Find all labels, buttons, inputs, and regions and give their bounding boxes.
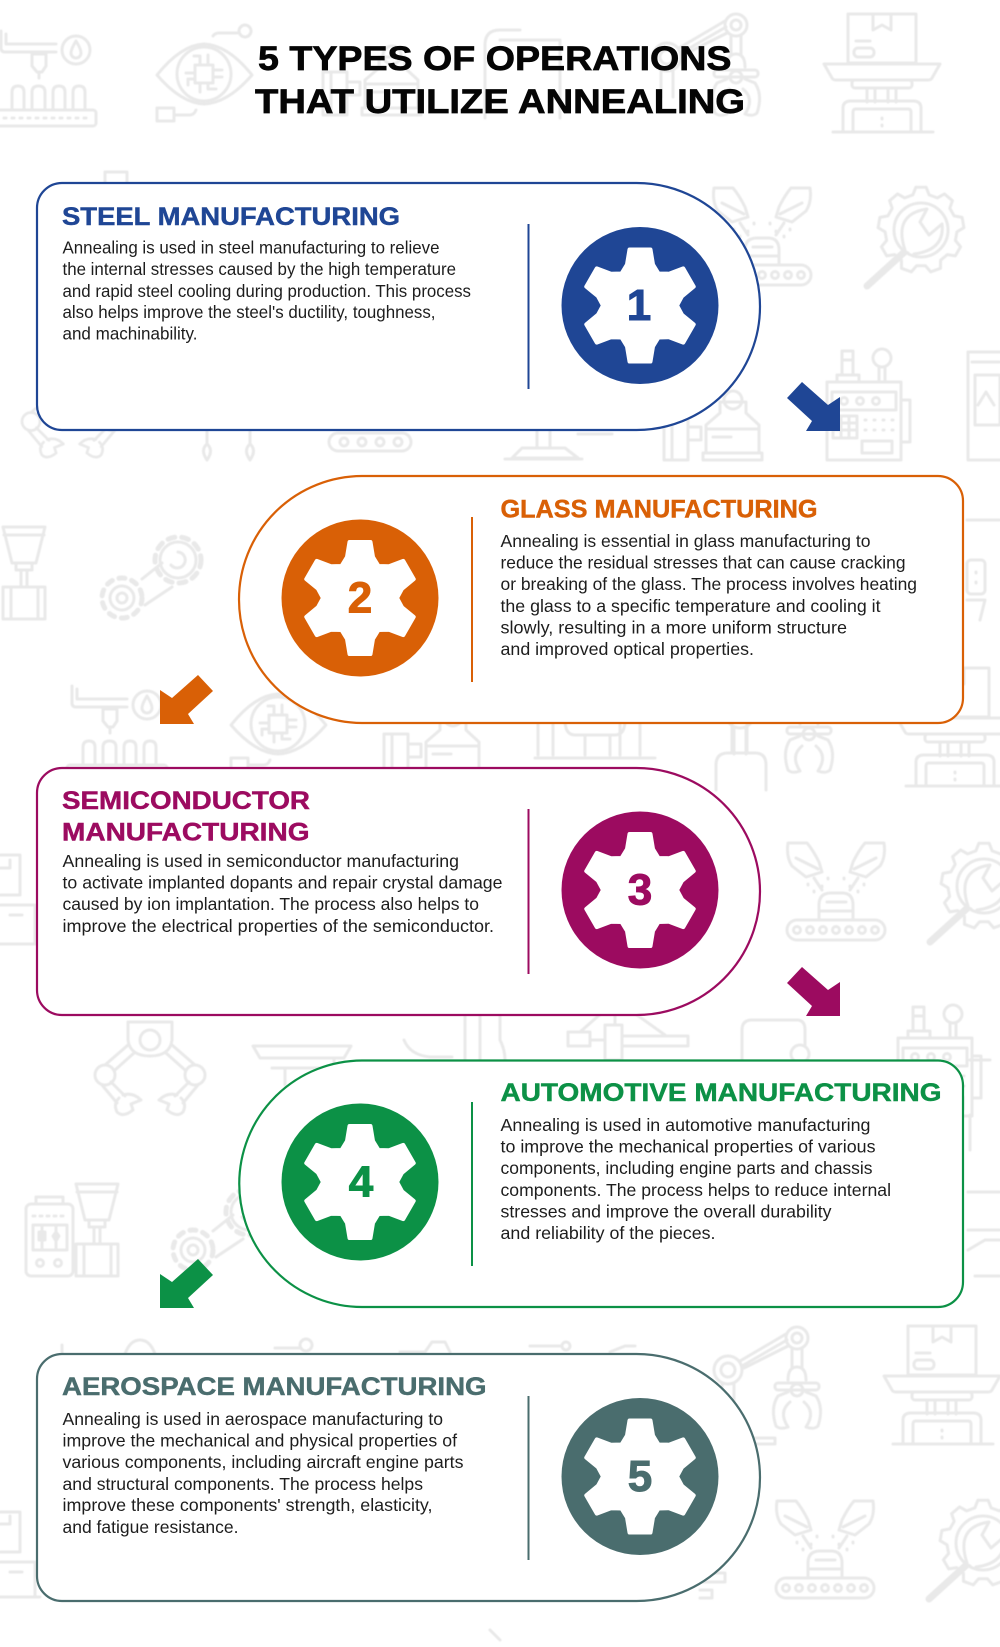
title	[255, 40, 745, 121]
panel 5 body text: improve these components' strength, elasticity,	[62, 1495, 432, 1515]
icon: gear number 3	[562, 812, 718, 968]
arrow: glass to semiconductor	[160, 675, 213, 724]
panel 3 body text: caused by ion implantation. The process also helps to	[62, 894, 479, 914]
icon: gear number 4	[282, 1104, 438, 1260]
title: 5 TYPES OF OPERATIONS	[258, 40, 732, 78]
arrow: semiconductor to automotive	[787, 967, 840, 1016]
panel 5 divider	[528, 1396, 530, 1560]
panel 3 heading: MANUFACTURING	[62, 820, 310, 846]
panel 4 divider	[471, 1102, 473, 1266]
panel 2 outline	[239, 476, 963, 723]
panel 5 body text	[62, 1409, 464, 1537]
panel 2 body text: Annealing is essential in glass manufacturing to	[500, 531, 870, 551]
panel 5 body text: and fatigue resistance.	[62, 1517, 238, 1537]
panel 4 body text: and reliability of the pieces.	[500, 1223, 716, 1243]
panel: aerospace manufacturing	[37, 1354, 760, 1601]
icon: gear number 5: 5	[628, 1452, 652, 1501]
icon: gear number 4: 4	[349, 1158, 374, 1206]
panel 1 outline	[37, 183, 760, 430]
panel 1 body text: also helps improve the steel's ductility, toughness,	[62, 302, 436, 322]
arrow: automotive to aerospace	[160, 1259, 213, 1308]
panel 2 body text: slowly, resulting in a more uniform structure	[500, 618, 847, 638]
panel 4 heading: AUTOMOTIVE MANUFACTURING	[500, 1080, 942, 1107]
panel 4 body text: components, including engine parts and chassis	[500, 1158, 873, 1178]
panel 4 body text: to improve the mechanical properties of various	[500, 1137, 876, 1157]
panel 3 body text	[62, 851, 503, 936]
panel: steel manufacturing	[37, 183, 760, 430]
panel 3 heading	[62, 788, 310, 846]
panel 1 divider	[528, 224, 530, 389]
panel: semiconductor manufacturing	[37, 768, 760, 1015]
panel 5 body text: and structural components. The process helps	[62, 1474, 423, 1494]
panel 4 body text: components. The process helps to reduce internal	[500, 1180, 891, 1200]
panel 2 body text: reduce the residual stresses that can cause cracking	[500, 553, 906, 573]
panel 3 body text: to activate implanted dopants and repair crystal damage	[62, 873, 503, 893]
panel 2 body text: or breaking of the glass. The process involves heating	[500, 574, 917, 594]
panel 3 divider	[528, 809, 530, 974]
panel 3 body text: Annealing is used in semiconductor manufacturing	[62, 851, 459, 871]
panel 4 body text: Annealing is used in automotive manufacturing	[500, 1115, 870, 1135]
arrow: steel to glass	[787, 382, 840, 431]
panel: glass manufacturing	[239, 476, 963, 723]
panel 1 body text: and rapid steel cooling during production. This process	[62, 281, 471, 301]
panel 1 body text: the internal stresses caused by the high temperature	[62, 259, 456, 279]
panel 2 body text	[500, 531, 917, 659]
panel 1 body text: Annealing is used in steel manufacturing to relieve	[62, 238, 440, 258]
panel 4 outline	[239, 1060, 963, 1307]
panel 5 body text: improve the mechanical and physical properties of	[62, 1431, 457, 1451]
icon: gear number 1: 1	[627, 281, 651, 330]
panel 5 heading: AEROSPACE MANUFACTURING	[62, 1374, 486, 1401]
panel 2 body text: the glass to a specific temperature and cooling it	[500, 596, 881, 616]
panel 2 divider	[471, 517, 473, 682]
panel 1 body text	[62, 238, 471, 344]
panel 4 body text	[500, 1115, 891, 1243]
panel 5 body text: various components, including aircraft engine parts	[62, 1452, 464, 1472]
icon: gear number 2: 2	[348, 574, 372, 622]
panel: automotive manufacturing	[239, 1060, 963, 1307]
panel 1 body text: and machinability.	[62, 324, 198, 344]
panel 3 body text: improve the electrical properties of the semiconductor.	[62, 916, 494, 936]
panel 3 heading: SEMICONDUCTOR	[62, 788, 310, 815]
icon: gear number 5	[562, 1398, 718, 1555]
panel 4 body text: stresses and improve the overall durability	[500, 1202, 832, 1222]
panel 5 body text: Annealing is used in aerospace manufacturing to	[62, 1409, 443, 1429]
panel 5 outline	[37, 1354, 760, 1601]
icon: gear number 2	[282, 520, 438, 676]
panel 2 body text: and improved optical properties.	[500, 639, 754, 659]
title: THAT UTILIZE ANNEALING	[255, 83, 745, 121]
panel 1 heading: STEEL MANUFACTURING	[62, 204, 400, 231]
icon: gear number 1	[562, 227, 718, 384]
icon: gear number 3: 3	[628, 866, 652, 914]
panel 2 heading: GLASS MANUFACTURING	[500, 496, 818, 524]
panel 3 outline	[37, 768, 760, 1015]
